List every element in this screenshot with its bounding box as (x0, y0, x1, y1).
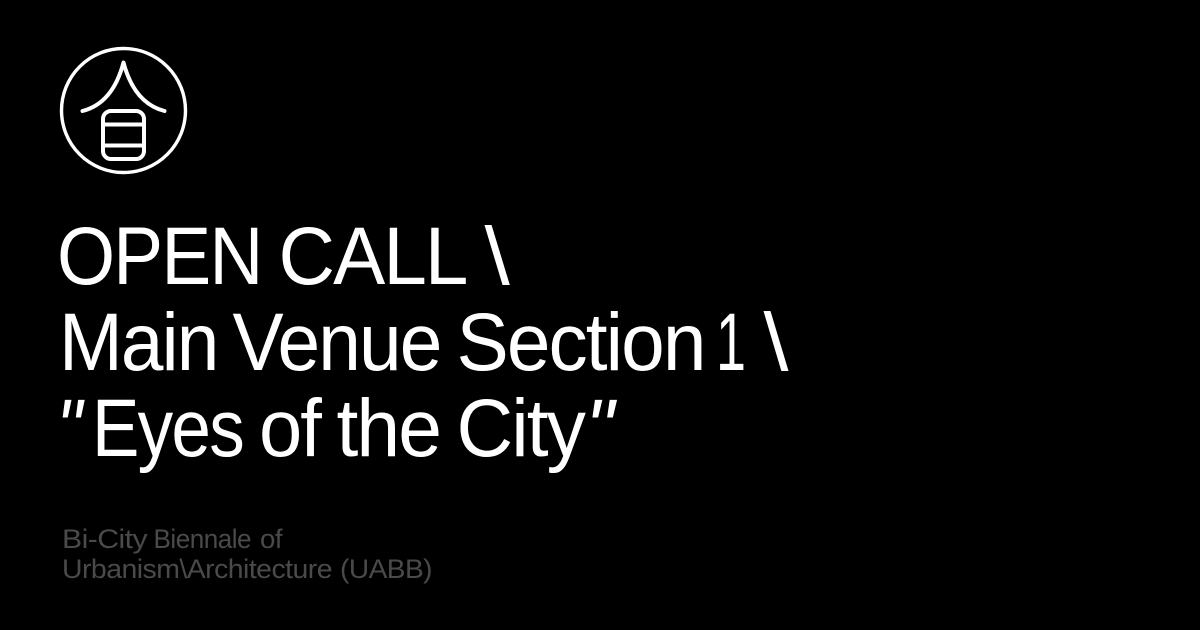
title: City (456, 383, 586, 474)
icon: logo (62, 48, 186, 172)
title: " (56, 383, 85, 474)
title: 1 (716, 297, 746, 388)
title: CALL (278, 211, 466, 302)
subtitle: organiser: of (260, 524, 283, 554)
subtitle: organiser: Bi-City (62, 524, 148, 554)
title: the (336, 383, 440, 474)
title: Section (456, 297, 704, 388)
title: of (259, 383, 322, 474)
subtitle: organiser (62, 524, 432, 584)
title: \ (764, 297, 789, 388)
title (56, 211, 789, 474)
title: OPEN (57, 211, 262, 302)
title: Eyes (92, 383, 243, 474)
title: Venue (232, 297, 440, 388)
title: " (585, 383, 618, 474)
subtitle: organiser: Biennale (154, 524, 251, 554)
subtitle: organiser: Urbanism\Architecture (62, 554, 332, 584)
subtitle: organiser: (UABB) (340, 554, 432, 584)
title: \ (484, 211, 510, 302)
title: Main (59, 297, 218, 388)
